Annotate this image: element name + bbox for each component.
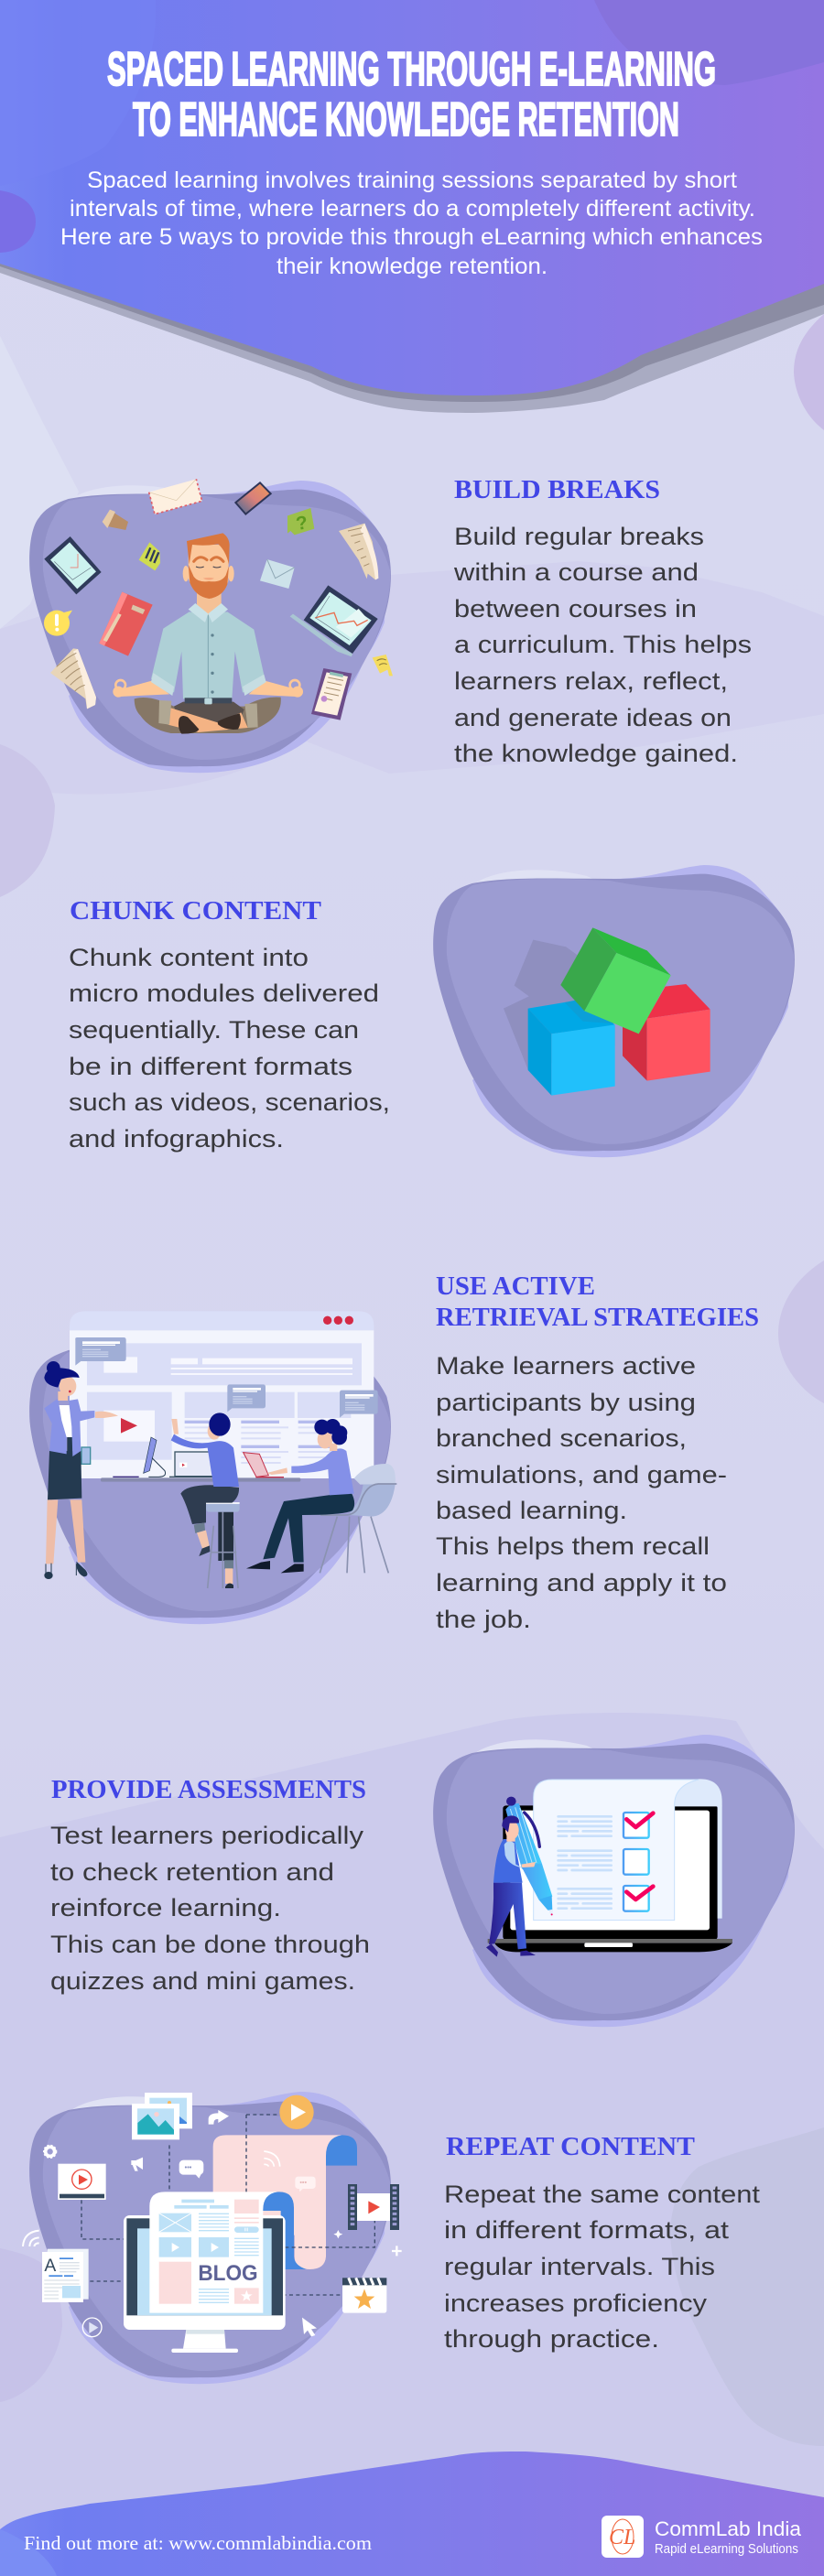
logo: CL	[609, 2526, 635, 2549]
gear	[46, 2147, 55, 2156]
body text	[50, 1822, 370, 1995]
header banner	[0, 0, 824, 413]
body text: participants by using	[436, 1389, 696, 1416]
illustration: blob and blog monitor with media icons: A	[44, 2257, 56, 2276]
illustration: blob and blog monitor with media icons: •••	[299, 2178, 307, 2186]
body text: This can be done through	[50, 1931, 370, 1958]
footer link text: Find out more at: www.commlabindia.com	[24, 2532, 372, 2554]
illustration: blob and cubes	[433, 865, 795, 1157]
envelope	[149, 479, 202, 514]
body text: within a course and	[453, 558, 699, 586]
body text: a curriculum. This helps	[454, 631, 752, 658]
chat bubble	[179, 2160, 203, 2175]
body text: learners relax, reflect,	[454, 667, 728, 695]
share arrow	[209, 2110, 229, 2125]
chair and woman seated	[354, 1464, 396, 1485]
megaphone	[131, 2158, 143, 2171]
document	[48, 2249, 89, 2300]
body text: to check retention and	[50, 1858, 334, 1886]
logo: CommLab India	[655, 2517, 802, 2540]
illustration: blob and meditating man: ?	[295, 512, 309, 535]
body text	[453, 523, 752, 767]
blog content	[159, 2200, 259, 2257]
small play	[82, 2318, 102, 2337]
logo	[602, 2516, 802, 2558]
body text: reinforce learning.	[50, 1894, 281, 1921]
panel: use active retrieval strategies	[29, 1272, 759, 1633]
play button	[279, 2095, 314, 2129]
illustration: blob and blog monitor with media icons: BLOG	[198, 2261, 258, 2286]
body text	[69, 944, 390, 1153]
sparkle and plus	[333, 2230, 342, 2238]
cursor	[302, 2318, 317, 2336]
body text: learning and apply it to	[436, 1569, 727, 1596]
body text: regular intervals. This	[444, 2253, 715, 2280]
heading: PROVIDE ASSESSMENTS	[51, 1775, 366, 1804]
heading: RETRIEVAL STRATEGIES	[436, 1303, 759, 1332]
illustration: blob, laptop checklist and person with pen	[433, 1735, 795, 2027]
monitor	[124, 2215, 286, 2330]
intro paragraph: intervals of time, where learners do a completely different activity.	[70, 196, 755, 222]
body text: Repeat the same content	[444, 2181, 761, 2208]
body text: increases proficiency	[444, 2289, 708, 2317]
title	[107, 43, 716, 146]
pictures	[145, 2093, 192, 2128]
dashed connectors	[81, 2115, 374, 2295]
body text: through practice.	[444, 2325, 659, 2353]
body text: Make learners active	[436, 1352, 696, 1380]
intro paragraph	[60, 168, 763, 279]
person with pen	[525, 1813, 539, 1846]
heading: USE ACTIVE	[436, 1272, 595, 1301]
heading: BUILD BREAKS	[454, 475, 660, 504]
body text: Test learners periodically	[50, 1822, 364, 1849]
monitor and laptops	[144, 1437, 157, 1473]
body text: such as videos, scenarios,	[69, 1088, 390, 1116]
man	[135, 697, 281, 733]
body text: in different formats, at	[444, 2216, 730, 2244]
clapperboard	[342, 2284, 386, 2313]
body text: quizzes and mini games.	[50, 1967, 355, 1995]
panel: chunk content	[69, 865, 795, 1157]
body text: Chunk content into	[69, 944, 309, 971]
speech bubbles	[75, 1337, 126, 1366]
intro paragraph: Here are 5 ways to provide this through eLearning which enhances	[60, 224, 763, 250]
logo: Rapid eLearning Solutions	[655, 2541, 798, 2557]
heading: REPEAT CONTENT	[446, 2132, 695, 2161]
body text: This helps them recall	[436, 1532, 710, 1560]
pink scroll	[326, 2135, 357, 2166]
heading	[436, 1272, 759, 1332]
intro paragraph: Spaced learning involves training sessions separated by short	[87, 168, 737, 193]
body text	[436, 1352, 727, 1633]
panel: repeat content	[23, 2092, 761, 2384]
illustration: blob and blog monitor with media icons: •••	[185, 2163, 192, 2171]
body text: based learning.	[436, 1497, 627, 1524]
wifi	[23, 2231, 39, 2246]
body text: Build regular breaks	[454, 523, 704, 550]
video card	[58, 2164, 106, 2200]
body text: and generate ideas on	[454, 704, 732, 731]
body text: between courses in	[454, 595, 697, 622]
body text: the knowledge gained.	[454, 740, 738, 767]
panel: build breaks	[29, 475, 752, 773]
illustration: blob and meditating man	[29, 479, 393, 773]
body text: simulations, and game-	[436, 1461, 727, 1488]
body text: branched scenarios,	[436, 1424, 687, 1452]
body text: and infographics.	[69, 1125, 284, 1153]
intro paragraph: their knowledge retention.	[276, 254, 548, 279]
illustration: blob, web page and three people	[29, 1311, 396, 1624]
body text: sequentially. These can	[69, 1016, 359, 1044]
film strip	[348, 2184, 357, 2230]
panel: provide assessments	[50, 1735, 795, 2027]
heading: CHUNK CONTENT	[70, 896, 321, 925]
woman standing	[46, 1499, 58, 1564]
footer band	[0, 2452, 824, 2576]
illustration: blob and blog monitor with media icons	[23, 2092, 402, 2384]
body text: micro modules delivered	[69, 980, 379, 1007]
body text: be in different formats	[69, 1053, 352, 1080]
body text	[444, 2181, 761, 2353]
body text: the job.	[436, 1606, 531, 1633]
seated man on stool	[218, 1512, 233, 1561]
